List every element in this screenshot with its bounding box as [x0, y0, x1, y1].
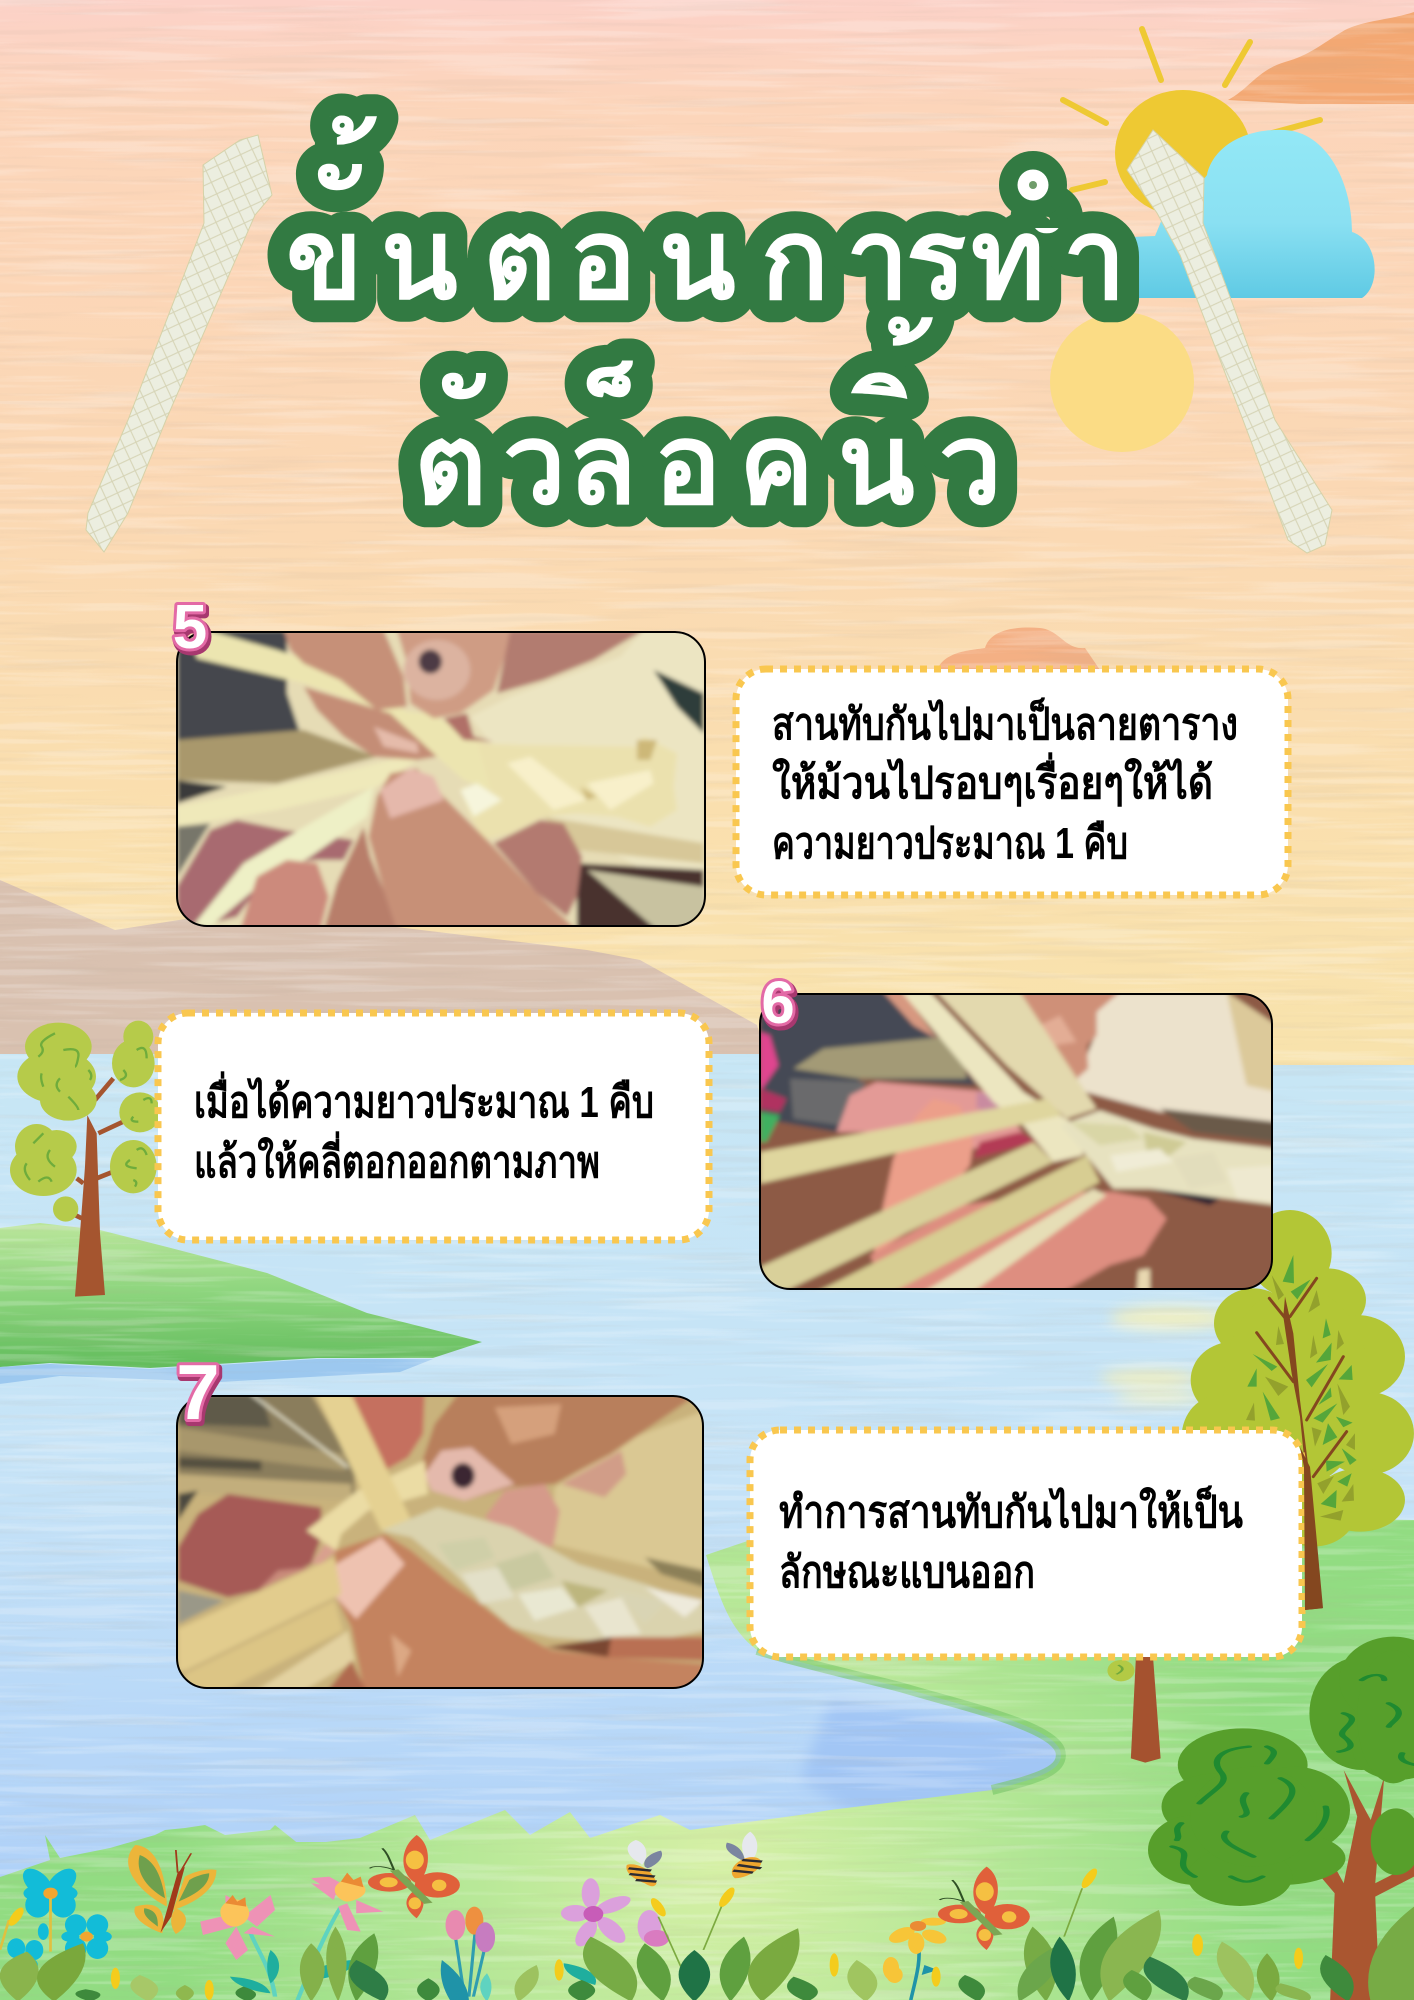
title outline [286, 115, 1126, 527]
flower: purple daisy [561, 1878, 669, 1947]
badge: number 5: 5 [175, 596, 209, 665]
trunk of right tree over box edge [1300, 1447, 1323, 1610]
flower: pink left [200, 1895, 275, 1997]
garden strip: flowers, insects and leaves [0, 1832, 1414, 2000]
photo frame: step 7 [177, 1396, 703, 1688]
text: step 6 description: เมื่อได้ความยาวประมาณ 1 คืบ [194, 1071, 654, 1127]
background: orange cloud top right [1228, 12, 1414, 104]
background: hill shadow on water [0, 1359, 433, 1384]
background: mountains [0, 880, 770, 1070]
badge: number 6: 6 [761, 969, 795, 1036]
icon: sun with rays [1063, 29, 1320, 216]
badge: number 7: 7 [176, 1348, 220, 1436]
flower: yellow [883, 1918, 951, 2000]
background: pale reflections [1100, 1306, 1230, 1404]
butterfly: orange left [368, 1835, 460, 1918]
flowers: tulips [445, 1907, 495, 1997]
text: step 5 description: ความยาวประมาณ 1 คืบ [772, 819, 1128, 868]
background: grass tufts on the shore [0, 1810, 830, 1900]
icon: right woven finger lock [1127, 130, 1332, 553]
title outline: ตัวล็อคนิ้ว [414, 316, 1002, 527]
title outline: ขั้นตอนการทำ [286, 115, 1126, 322]
yellow grass spikes [6, 1868, 1303, 2000]
icon: blue cloud [1133, 130, 1375, 298]
tree: small trunk behind step 7 box [1107, 1650, 1161, 1763]
badge: number 5: 5 [173, 593, 207, 662]
background: meadow [0, 1515, 1414, 2000]
icon: pale yellow sun [1050, 312, 1194, 452]
text: step 5 description [772, 697, 1238, 868]
text: step 7 description: ทำการสานทับกันไปมาให้เป็น [779, 1485, 1243, 1537]
background: left hill [0, 1223, 482, 1368]
text: step 5 description: สานทับกันไปมาเป็นลายตาราง [772, 697, 1238, 749]
title line 1: ขั้นตอนการทำ [286, 115, 1126, 322]
title line 2: ตัวล็อคนิ้ว [414, 316, 1002, 527]
photo: step 7 weaving [178, 1397, 702, 1687]
tree: dark green pair bottom right [1148, 1637, 1414, 2000]
tree: left [10, 1021, 161, 1297]
text box: step 6 [158, 1013, 709, 1240]
butterfly: yellow [128, 1845, 216, 1934]
photo: step 6 weaving [753, 985, 1280, 1299]
flowers: cyan [7, 1868, 112, 1973]
flower: pink right [298, 1873, 383, 2000]
badge: number 6: 6 [763, 972, 797, 1039]
background: lake deep tone [800, 1700, 1065, 1830]
icon: left woven finger lock [86, 135, 272, 552]
butterfly: orange right [938, 1867, 1030, 1950]
text: step 5 description: ให้ม้วนไปรอบๆเรื่อยๆให้ได้ [772, 752, 1213, 808]
badge: number 7: 7 [178, 1351, 222, 1439]
foreground leaves [0, 1907, 1414, 2000]
background: water [0, 1054, 1414, 1900]
background: painted sky [0, 0, 1414, 1080]
text: step 7 description [779, 1485, 1243, 1597]
bee: left [626, 1840, 662, 1886]
background: shore edge [757, 1650, 1061, 1790]
text: step 7 description: ลักษณะแบนออก [779, 1548, 1035, 1597]
teal leaves [230, 1950, 596, 1993]
text box: step 5 [736, 669, 1288, 895]
title [286, 115, 1126, 527]
title: raised circle of sara am [1018, 170, 1048, 200]
text: step 6 description [194, 1071, 654, 1187]
photo: step 5 weaving [170, 623, 710, 937]
photo frame: step 5 [177, 632, 705, 926]
text: step 6 description: แล้วให้คลี่ตอกออกตามภาพ [194, 1131, 600, 1187]
tree: right yellow-green [1182, 1210, 1414, 1610]
photo frame: step 6 [760, 994, 1272, 1289]
background: orange bump behind step 5 box [937, 628, 1100, 670]
bee: right [726, 1832, 762, 1878]
text box: step 7 [750, 1430, 1302, 1657]
